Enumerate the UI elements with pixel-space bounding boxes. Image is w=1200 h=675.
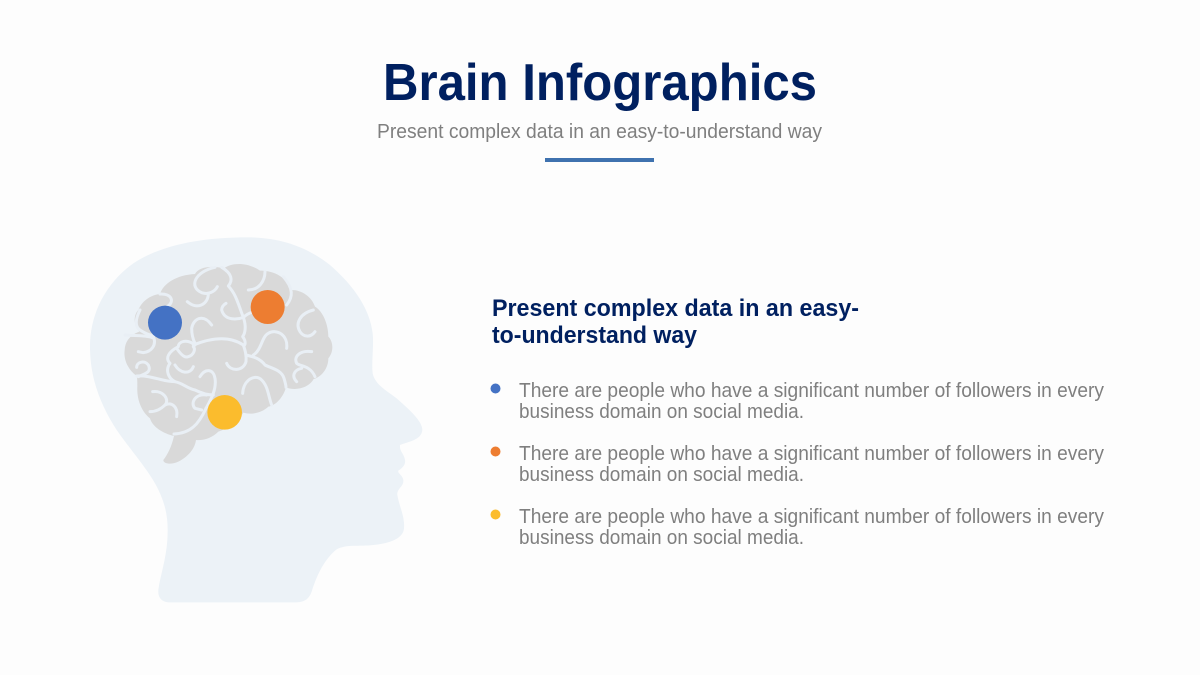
marker: orange xyxy=(251,290,285,324)
bullet 1: business domain on social media. xyxy=(519,401,804,423)
bullet 1 xyxy=(490,380,1104,423)
marker: yellow xyxy=(207,395,242,430)
bullet 3: There are people who have a significant number of followers in every xyxy=(519,506,1104,528)
content heading: to-understand way xyxy=(492,322,698,349)
brain shape xyxy=(124,264,332,464)
bullet 2 xyxy=(490,443,1104,486)
brain folds xyxy=(125,267,315,434)
bullet 2: There are people who have a significant number of followers in every xyxy=(519,443,1104,465)
marker: blue xyxy=(148,306,182,340)
subtitle: Present complex data in an easy-to-understand way xyxy=(377,121,822,143)
bullet 2: business domain on social media. xyxy=(519,464,804,486)
title: Brain Infographics xyxy=(383,54,817,112)
bullet 3 xyxy=(490,506,1104,549)
head illustration xyxy=(90,237,422,602)
bullet 3: business domain on social media. xyxy=(519,527,804,549)
head silhouette xyxy=(90,237,422,602)
brain xyxy=(124,264,332,464)
bullet 1: There are people who have a significant number of followers in every xyxy=(519,380,1104,402)
title underline xyxy=(545,158,654,162)
content heading: Present complex data in an easy- xyxy=(492,295,859,322)
content heading xyxy=(492,295,859,349)
